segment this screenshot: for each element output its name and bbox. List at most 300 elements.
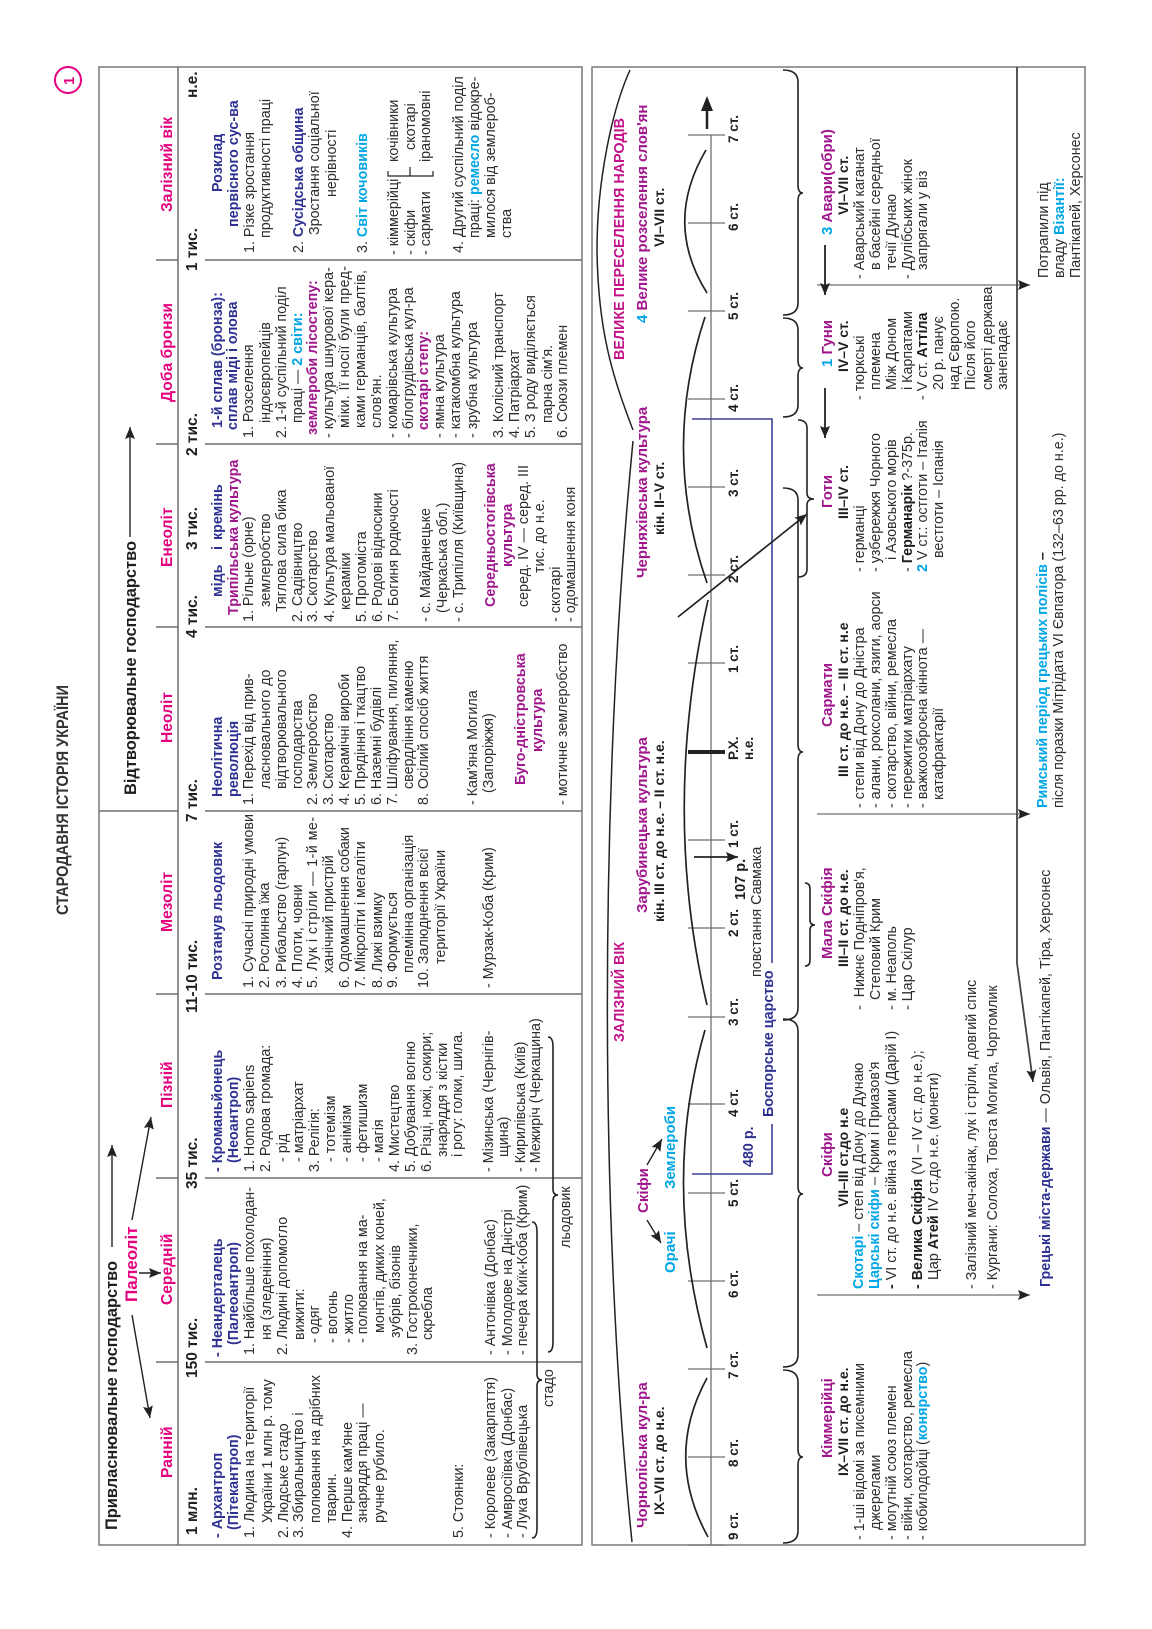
column: early paleolithic: знаряддя праці —: [355, 1403, 371, 1523]
block: cimmerians: [819, 1351, 931, 1540]
column: neolithic: господарства: [290, 700, 306, 789]
column: bronze age: - культура шнурової кера-: [321, 267, 337, 438]
century labels: 6 ст.: [726, 1270, 741, 1298]
era labels: [610, 118, 628, 1042]
block: cimmerians: Кіммерійці: [819, 1378, 836, 1458]
century labels: 1 ст.: [726, 820, 741, 848]
block: goths: - германці: [852, 505, 868, 572]
column: bronze age: - комарівська культура: [385, 288, 401, 438]
block: scythians: - Кургани: Солоха, Товста Могила, Чортомлик: [985, 985, 1001, 1289]
culture labels: Чорноліська кул-ра: [634, 1382, 651, 1528]
column: bronze age: 2. 1-й суспільний поділ: [274, 286, 290, 438]
block: cimmerians: - 1-ші відомі за писемними: [852, 1363, 868, 1540]
century labels: 5 ст.: [726, 292, 741, 320]
column: neolithic: свердління каменю: [401, 660, 417, 789]
block: scythians: Скіфи: [819, 1132, 836, 1177]
column: neolithic: культура: [530, 688, 546, 752]
period headers: Залізний вік: [159, 117, 176, 212]
block: cimmerians: джерелами: [868, 1455, 884, 1530]
column: early paleolithic: - Лука Врублівецька: [515, 1405, 531, 1538]
column: mesolithic: - Мурзак-Коба (Крим): [481, 847, 497, 988]
column: neolithic: 4. Керамічні вироби: [337, 674, 353, 805]
period headers: Неоліт: [159, 692, 176, 743]
column: late paleolithic: 6. Різці, ножі, сокири;: [419, 1032, 435, 1172]
column: early paleolithic: полювання на дрібних: [308, 1375, 324, 1523]
column: middle paleolithic: - печера Киїк-Коба (Крим): [515, 1185, 531, 1355]
column: late paleolithic: 3. Релігія:: [307, 1108, 323, 1172]
column: early paleolithic: України 1 млн р. тому: [260, 1378, 276, 1523]
block: goths: Готи: [819, 475, 836, 508]
column: early paleolithic: - Амвросіївка (Донбас): [500, 1388, 516, 1538]
date labels: 150 тис.: [184, 1318, 201, 1378]
column: bronze age: ками германців, балтів,: [353, 270, 369, 428]
column: middle paleolithic: 1. Найбільше похолодан-: [242, 1187, 258, 1355]
scythian division: Скіфи: [635, 1168, 652, 1213]
scythian division: [635, 1106, 679, 1273]
savmak uprising: 107 р.: [733, 859, 749, 900]
column: neolithic: революція: [226, 721, 242, 797]
column: eneolithic: мідь: [210, 564, 226, 597]
column: middle paleolithic: скребла: [420, 1287, 436, 1340]
column: mesolithic: 4. Плоти, човни: [290, 884, 306, 988]
column: late paleolithic: (Неоантроп): [226, 1077, 242, 1163]
column: bronze age: 1. Розселення: [241, 345, 257, 438]
column: early paleolithic: 2. Людське стадо: [276, 1423, 292, 1538]
column: neolithic: 8. Осілий спосіб життя: [416, 656, 432, 805]
block: huns: 20 р. панує: [931, 316, 947, 390]
date labels: 4 тис.: [184, 595, 201, 638]
heading: producing economy: Відтворювальне господарство: [121, 541, 140, 795]
block: goths: [819, 420, 947, 572]
date labels: 11-10 тис.: [184, 940, 201, 1013]
savmak uprising: [694, 847, 765, 977]
column: mesolithic: [210, 814, 497, 988]
column: middle paleolithic: зубрів, бізонів: [388, 1245, 404, 1338]
block: huns: Після його: [963, 321, 979, 390]
braces: [783, 70, 815, 1543]
column: iron age: 4. Другий суспільний поділ: [451, 76, 467, 253]
column: eneolithic: 1. Рільне (орне): [241, 516, 257, 622]
column: early paleolithic: 1. Людина на території: [242, 1387, 258, 1538]
column: bronze age: 1-й сплав (бронза):: [210, 292, 226, 428]
column: neolithic: відтворювального: [274, 669, 290, 789]
column: eneolithic: (Черкаська обл.): [435, 503, 451, 613]
column: mesolithic: племінна організація: [401, 835, 417, 973]
block: lesser scythia: Мала Скіфія: [819, 867, 836, 959]
block: byzantium: Потрапили під: [1036, 182, 1052, 278]
century labels: 7 ст.: [726, 115, 741, 143]
column: iron age: продуктивності праці: [258, 99, 274, 238]
bosporan kingdom span: [692, 419, 777, 1174]
era labels: ЗАЛІЗНИЙ ВІК: [610, 941, 628, 1042]
column: mesolithic: 6. Одомашнення собаки: [337, 827, 353, 988]
block: cimmerians: IX–VII ст. до н.е.: [835, 1367, 851, 1476]
block: sarmatians: Сармати: [819, 663, 836, 727]
culture labels: 4 Велике розселення слов'ян: [634, 104, 651, 323]
column: eneolithic: - с. Трипілля (Київщина): [451, 462, 467, 622]
period headers: Енеоліт: [159, 507, 176, 567]
block: sarmatians: - скотарство, війни, ремесла: [884, 619, 900, 808]
block: huns: 1 Гуни: [819, 320, 836, 367]
column: mesolithic: 8. Лижі взимку: [370, 892, 386, 988]
column: mesolithic: території України: [433, 850, 449, 964]
block: huns: Між Доном: [884, 318, 900, 390]
diagonal arrow: [678, 514, 807, 617]
column: bronze age: 3. Колісний транспорт: [491, 292, 507, 438]
culture labels: IX–VII ст. до н.е.: [651, 1406, 667, 1515]
block: cimmerians: - кобилодойці (конярство): [915, 1362, 931, 1540]
column: early paleolithic: ручне рубило.: [372, 1429, 388, 1523]
column: eneolithic: культура: [500, 503, 516, 567]
column: iron age: 1. Різке зростання: [242, 132, 258, 253]
block: avars: в басейні середньої: [868, 138, 884, 270]
column: eneolithic: землеробство: [258, 513, 274, 607]
column: late paleolithic: і рогу: голки, шила.: [450, 1031, 466, 1157]
block: scythians: - Залізний меч-акінак, лук і стріли, довгий спис: [964, 980, 980, 1289]
column: bronze age: [210, 266, 571, 438]
column: middle paleolithic: - полювання на ма-: [355, 1214, 371, 1343]
era arcs: [597, 70, 633, 1542]
column: neolithic: (Запоріжжя): [481, 713, 497, 793]
block: huns: - тюркські: [852, 336, 868, 400]
block: byzantium: Пантікапей, Херсонес: [1068, 132, 1084, 278]
panel: timeline: [592, 67, 1085, 1545]
century labels: 2 ст.: [726, 909, 741, 937]
block: goths: - Германарік ?-375р.: [900, 432, 916, 572]
block: lesser scythia: Степовий Крим: [868, 898, 884, 1000]
block: huns: [819, 287, 1011, 400]
brace: herd: стадо: [541, 1369, 557, 1407]
column: eneolithic: - одомашнення коня: [563, 487, 579, 622]
column: early paleolithic: - Королеве (Закарпаття): [483, 1377, 499, 1538]
column: bronze age: - ямна культура: [432, 334, 448, 438]
column: late paleolithic: - тотемізм: [323, 1096, 339, 1162]
period headers: Ранній: [159, 1426, 176, 1478]
block: sarmatians: - пережитки матріархату: [900, 645, 916, 808]
column: neolithic: 5. Прядіння і ткацтво: [353, 666, 369, 805]
column: eneolithic: кремінь: [210, 484, 226, 540]
column: bronze age: - білогрудівська кул-ра: [401, 287, 417, 438]
column: late paleolithic: - фетишизм: [355, 1084, 371, 1162]
column: iron age: нерівності: [324, 130, 340, 197]
column: late paleolithic: - Кирилівська (Київ): [513, 1042, 529, 1172]
block: sarmatians: - алани, роксолани, язиги, аорси: [868, 591, 884, 808]
block: roman period: Римський період грецьких полісів –: [1035, 552, 1051, 808]
column: bronze age: - зрубна культура: [465, 322, 481, 438]
column: eneolithic: кераміки: [338, 552, 354, 610]
column: eneolithic: 7. Богиня родючості: [386, 489, 402, 622]
brace: glacier: льодовик: [558, 1186, 574, 1248]
century labels: 3 ст.: [726, 998, 741, 1026]
column: middle paleolithic: [210, 1185, 531, 1357]
column: iron age: 2. Сусідська община: [291, 106, 307, 253]
block: avars: [819, 129, 931, 279]
column: early paleolithic: (Пітекантроп): [226, 1434, 242, 1530]
block: sarmatians: [819, 591, 947, 808]
column: iron age: [210, 76, 515, 255]
column: eneolithic: 2. Садівництво: [290, 523, 306, 622]
block: avars: запрягали у віз: [915, 170, 931, 270]
heading: paleolithic with arrows: [122, 1117, 161, 1418]
column: neolithic: - Кам'яна Могила: [465, 690, 481, 805]
title: СТАРОДАВНЯ ІСТОРІЯ УКРАЇНИ: [53, 685, 72, 915]
column: early paleolithic: 5. Стоянки:: [451, 1464, 467, 1538]
block: avars: 3 Авари(обри): [819, 129, 836, 235]
century labels: 9 ст.: [726, 1512, 741, 1540]
column: mesolithic: Розтанув льодовик: [210, 841, 226, 980]
block: scythians: Скотарі – степ від Дону до Дунаю: [851, 1062, 867, 1289]
column: eneolithic: серед. IV — серед. III: [516, 465, 532, 607]
block: sarmatians: III ст. до н.е. – III ст. н.е: [835, 622, 851, 777]
block: greek city states: Грецькі міста-держави — Ольвія, Пантікапей, Тіра, Херсонес: [1038, 870, 1054, 1287]
block: huns: над Європою.: [947, 298, 963, 390]
icon: page number badge: 1: [61, 77, 78, 85]
column: mesolithic: 9. Формується: [385, 892, 401, 988]
block: byzantium: владу Візантії:: [1052, 177, 1068, 278]
column: eneolithic: - скотарі: [548, 567, 564, 622]
brace: herd: [532, 1222, 557, 1538]
flow arrows: [817, 245, 1030, 1295]
column: iron age: праці: ремесло відокре-: [467, 76, 483, 238]
column: bronze age: сплав міді і олова: [225, 301, 241, 430]
column: iron age: 3. Світ кочовиків: [355, 133, 371, 253]
column: early paleolithic: - Архантроп: [210, 1453, 226, 1538]
block: sarmatians: - важкоозброєна кіннота —: [915, 628, 931, 808]
column: eneolithic: - с. Майданецьке: [418, 508, 434, 622]
block: goths: III–IV ст.: [835, 465, 851, 519]
column: early paleolithic: 3. Збиральництво і: [291, 1412, 307, 1538]
date labels: 3 тис.: [184, 507, 201, 550]
block: roman period: після поразки Мітрідата VI Євпатора (132–63 рр. до н.е.): [1051, 433, 1067, 808]
column: middle paleolithic: (Палеоантроп): [226, 1242, 242, 1345]
era labels: ВЕЛИКЕ ПЕРЕСЕЛЕННЯ НАРОДІВ: [611, 118, 628, 360]
column: eneolithic: Тяглова сила бика: [274, 489, 290, 612]
block: scythians: Царські скіфи – Крим і Приазов'я: [867, 1062, 883, 1289]
column: eneolithic: 5. Протоміста: [354, 531, 370, 622]
column: early paleolithic: [210, 1375, 531, 1538]
culture labels: [634, 104, 667, 1528]
century labels: 8 ст.: [726, 1439, 741, 1467]
column: eneolithic: і: [210, 546, 226, 550]
block: byzantium: [1036, 132, 1084, 278]
column: neolithic: - мотичне землеробство: [555, 643, 571, 805]
date labels: 2 тис.: [184, 413, 201, 456]
heading: paleolithic with arrows: Палеоліт: [122, 1226, 141, 1302]
column: iron age: - кіммерійці: [386, 179, 402, 255]
date labels: [184, 71, 201, 1535]
column: bronze age: індоєвропейців: [258, 322, 274, 423]
column: mesolithic: 1. Сучасні природні умови: [241, 814, 257, 988]
bosporan kingdom span: Боспорське царство: [761, 970, 777, 1117]
column: middle paleolithic: - одяг: [307, 1305, 323, 1343]
block: lesser scythia: III–II ст. до н.е.: [835, 869, 851, 967]
column: late paleolithic: - анімізм: [339, 1105, 355, 1162]
scythian division: Орачі: [662, 1231, 679, 1273]
column: neolithic: Буго-дністровська: [513, 652, 529, 785]
column: eneolithic: Трипільська культура: [226, 459, 242, 615]
culture labels: кін. III ст. до н.е. – II ст. н.е.: [651, 740, 667, 922]
century labels: 7 ст.: [726, 1351, 741, 1379]
century labels: н.е.: [741, 737, 756, 760]
column: late paleolithic: - Кроманьйонець: [210, 1050, 226, 1172]
column: eneolithic: 3. Скотарство: [305, 530, 321, 622]
culture labels: Черняхівська культура: [634, 406, 651, 578]
column: eneolithic: 4. Культура мальованої: [322, 466, 338, 622]
block: scythians: VII–III ст.до н.е: [835, 1108, 851, 1207]
block: scythians: - VI ст. до н.е. війна з персами (Дарій І): [884, 1031, 900, 1289]
column: mesolithic: 7. Мікроліти і мегаліти: [353, 841, 369, 988]
date labels: 35 тис.: [184, 1137, 201, 1189]
block: cimmerians: - могутній союз племен: [884, 1385, 900, 1540]
block: lesser scythia: - Нижнє Подніпров'я,: [852, 867, 868, 1010]
century labels: Р.Х.: [726, 736, 741, 760]
column: late paleolithic: - магія: [371, 1119, 387, 1162]
column: mesolithic: 5. Лук і стріли — 1-й ме-: [305, 817, 321, 988]
column: bronze age: 5. З роду виділяється: [523, 295, 539, 438]
column: iron age: - сармати: [418, 191, 434, 255]
block: goths: 2 V ст.: остготи – Італія: [915, 420, 931, 572]
column: neolithic: 3. Скотарство: [321, 713, 337, 805]
column: iron age: - скіфи: [403, 210, 419, 255]
column: bronze age: землероби лісостепу:: [305, 280, 321, 435]
culture labels: VI–VII ст.: [651, 188, 667, 247]
block: lesser scythia: - м. Неаполь: [884, 926, 900, 1010]
column: bronze age: - катакомбна культура: [448, 291, 464, 438]
column: late paleolithic: [210, 1018, 544, 1172]
block: scythians: - Велика Скіфія (VI – IV ст. до н.е.);: [910, 1050, 926, 1289]
century labels: 4 ст.: [726, 1089, 741, 1117]
block: lesser scythia: [819, 867, 916, 1010]
column: late paleolithic: - матріархат: [291, 1081, 307, 1162]
column: iron age: скотарі: [403, 103, 419, 150]
column: late paleolithic: - Межиріч (Черкащина): [528, 1018, 544, 1172]
column: mesolithic: 3. Рибальство (гарпун): [274, 837, 290, 988]
block: avars: - Аварський каганат: [852, 147, 868, 279]
brace: glacier: [548, 1037, 574, 1352]
culture labels: кін. II–V ст.: [651, 462, 667, 535]
column: bronze age: слов'ян.: [369, 374, 385, 428]
century labels: 4 ст.: [726, 384, 741, 412]
column: iron age: кочівники: [386, 100, 402, 162]
column: middle paleolithic: ня (зледеніння): [259, 1238, 275, 1340]
block: avars: течії Дунаю: [884, 194, 900, 270]
column: late paleolithic: - рід: [275, 1133, 291, 1162]
column: mesolithic: 2. Рослинна їжа: [257, 883, 273, 988]
date labels: 1 млн.: [184, 1487, 201, 1535]
block: scythians: [819, 980, 1001, 1289]
column: bronze age: скотарі степу:: [416, 331, 432, 430]
column: middle paleolithic: - Молодове на Дністрі: [500, 1209, 516, 1355]
block: goths: - узбережжя Чорного: [868, 433, 884, 572]
century labels: [726, 115, 756, 1540]
date labels: н.е.: [184, 71, 201, 98]
column: neolithic: 1. Перехід від прив-: [241, 673, 257, 805]
column: iron age: Зростання соціальної: [307, 91, 323, 235]
column: early paleolithic: тварин.: [324, 1473, 340, 1523]
block: roman period: [1035, 433, 1067, 808]
block: sarmatians: катафрактарії: [931, 708, 947, 800]
icon: page number badge: [55, 67, 81, 93]
block: scythians: Цар Атей IV ст.до н.е. (монети): [926, 1073, 942, 1280]
column: eneolithic: 6. Родові відносини: [370, 493, 386, 622]
column: bronze age: парна сім'я.: [540, 345, 556, 423]
column: middle paleolithic: вижити:: [292, 1288, 308, 1340]
century labels: 1 ст.: [726, 645, 741, 673]
block: huns: IV–V ст.: [835, 320, 851, 372]
column: eneolithic: [210, 459, 579, 622]
block: huns: і Карпатами: [900, 311, 916, 390]
column: mesolithic: 10. Залюднення всієї: [416, 848, 432, 988]
column: middle paleolithic: - Неандерталець: [210, 1238, 226, 1357]
column: middle paleolithic: - вогонь: [325, 1291, 341, 1343]
period headers: Доба бронзи: [159, 303, 176, 402]
period headers: Пізній: [159, 1061, 176, 1108]
block: avars: VI–VII ст.: [835, 156, 851, 215]
column: late paleolithic: 5. Добування вогню: [403, 1041, 419, 1172]
column: middle paleolithic: - житло: [341, 1294, 357, 1343]
column: eneolithic: тис. до н.е.: [532, 499, 548, 573]
column: neolithic: 7. Шліфування, пиляння,: [385, 640, 401, 805]
column: neolithic: 2. Землеробство: [305, 693, 321, 805]
column: neolithic: Неолітична: [210, 716, 226, 797]
century labels: 5 ст.: [726, 1179, 741, 1207]
column: late paleolithic: 4. Мистецтво: [387, 1085, 403, 1172]
column: late paleolithic: - Мізинська (Чернігів-: [481, 1030, 497, 1172]
period headers: Мезоліт: [159, 872, 176, 932]
column: middle paleolithic: 3. Гостроконечники,: [405, 1223, 421, 1355]
date labels: 1 тис.: [184, 228, 201, 271]
divider with arrow to greek cities: [1017, 67, 1033, 1082]
column: neolithic: 6. Наземні будівлі: [369, 687, 385, 805]
block: avars: - Дулібських жінок: [900, 158, 916, 279]
block: huns: племена: [868, 332, 884, 390]
column: iron age: іраномовні: [418, 91, 434, 162]
column: middle paleolithic: 2. Людині допомогло: [275, 1217, 291, 1355]
block: huns: занепадає: [995, 320, 1011, 390]
column: late paleolithic: 2. Родова громада:: [258, 1045, 274, 1172]
century labels: 3 ст.: [726, 469, 741, 497]
heading: appropriating economy: Привласнювальне господарство: [102, 1261, 121, 1530]
block: huns: смерті держава: [980, 287, 996, 390]
column: neolithic: ласновального до: [258, 670, 274, 789]
column: late paleolithic: знаряддя з кістки: [435, 1043, 451, 1157]
savmak uprising: повстання Савмака: [749, 847, 765, 977]
column: iron age: Розклад: [210, 134, 226, 192]
column: middle paleolithic: - Антонівка (Донбас): [483, 1219, 499, 1355]
bosporan kingdom span: 480 р.: [741, 1126, 757, 1167]
column: bronze age: 6. Союзи племен: [555, 325, 571, 438]
column: mesolithic: ханічний пристрій: [321, 855, 337, 973]
panel: periods table: [99, 67, 582, 1545]
period headers: [159, 117, 176, 1478]
block: goths: вестготи – Іспанія: [931, 440, 947, 558]
column: early paleolithic: 4. Перше кам'яне: [340, 1422, 356, 1538]
block: lesser scythia: - Цар Скілур: [900, 927, 916, 1010]
block: huns: - V ст. Аттіла: [915, 311, 931, 400]
column: middle paleolithic: монтів, диких коней,: [372, 1198, 388, 1333]
column: bronze age: міки. Її носії були пред-: [336, 266, 353, 428]
column: iron age: ства: [499, 209, 515, 238]
column: late paleolithic: щина): [496, 1117, 512, 1157]
period headers: Середній: [159, 1234, 176, 1305]
block: cimmerians: - війни, скотарство, ремесла: [900, 1351, 916, 1540]
column: late paleolithic: 1. Homo sapiens: [242, 1065, 258, 1172]
culture labels: Зарубинецька культура: [634, 736, 651, 913]
chart: century axis: [683, 96, 756, 1545]
block: goths: і Азовського морів: [884, 439, 900, 560]
column: bronze age: праці — 2 світи:: [290, 313, 306, 423]
column: iron age: милося від землероб-: [483, 92, 499, 238]
